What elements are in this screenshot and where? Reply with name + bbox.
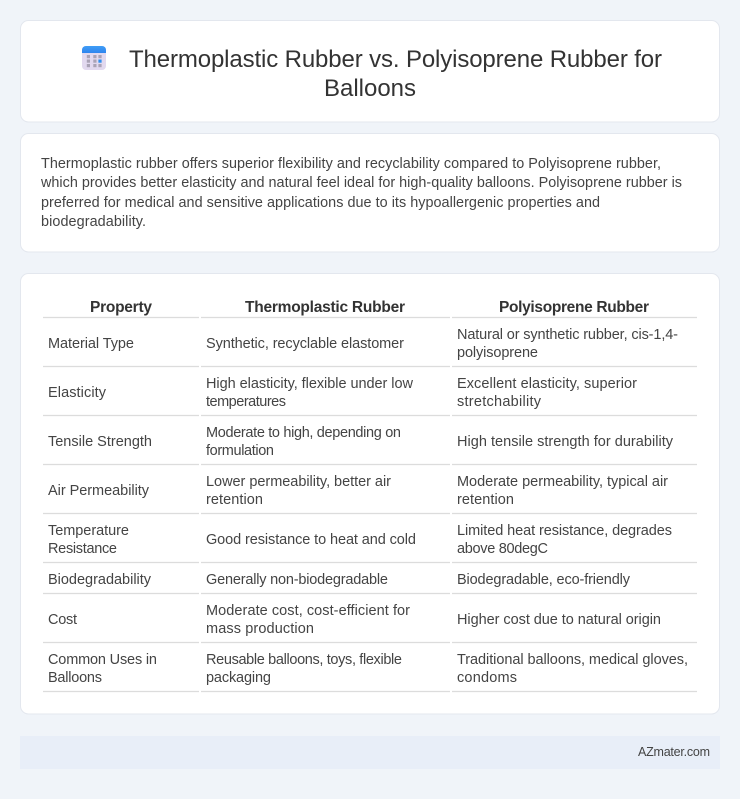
table header row: Polyisoprene Rubber [499,299,649,316]
title [129,46,662,102]
row: biodegradability: Biodegradable, eco-friendly [457,572,631,588]
row: biodegradability: Biodegradability [48,572,152,588]
row: biodegradability: Generally non-biodegradable [206,572,388,588]
row: tensile strength: Moderate to high, depending on [206,425,401,441]
row: elasticity: Excellent elasticity, superior [457,376,637,392]
row: material type: Synthetic, recyclable elastomer [206,336,404,352]
icon: calendar [82,46,106,70]
summary text: biodegradability. [41,214,146,230]
row: common uses: Reusable balloons, toys, flexible [206,652,402,668]
row: air permeability: Moderate permeability, typical air [457,474,668,490]
row: temperature resistance: Temperature [48,523,129,539]
row: common uses: packaging [206,670,271,686]
title: Balloons [324,75,416,102]
panel: comparison table [20,274,720,714]
row: tensile strength: formulation [206,443,274,459]
panel: title header [20,20,720,122]
row: air permeability: retention [457,492,514,508]
row: temperature resistance: Good resistance to heat and cold [206,532,416,548]
table header row: Property [90,299,152,316]
row: tensile strength: High tensile strength for durability [457,434,674,450]
panel: summary [20,134,720,252]
footer [20,736,720,769]
row: temperature resistance: above 80degC [457,541,548,557]
footer: AZmater.com [638,745,710,759]
row: common uses [48,652,688,686]
row: common uses: condoms [457,670,517,686]
row: elasticity: temperatures [206,394,286,410]
row: tensile strength [48,425,674,459]
table header row [90,299,649,316]
title: Thermoplastic Rubber vs. Polyisoprene Rubber for [129,46,662,73]
row: temperature resistance: Resistance [48,541,117,557]
row: biodegradability [48,572,631,588]
summary text: preferred for medical and sensitive applications due to its hypoallergenic properties and [41,195,600,211]
summary text [40,156,682,230]
row: temperature resistance: Limited heat resistance, degrades [457,523,672,539]
row: elasticity: High elasticity, flexible under low [206,376,414,392]
row: air permeability: retention [206,492,263,508]
row: material type [48,327,678,361]
row: cost: mass production [206,621,314,637]
row: common uses: Common Uses in [48,652,157,668]
row: elasticity: Elasticity [48,385,107,401]
row: tensile strength: Tensile Strength [48,434,152,450]
row: temperature resistance [48,523,672,557]
row: air permeability: Air Permeability [48,483,150,499]
row: material type: polyisoprene [457,345,538,361]
row: cost: Moderate cost, cost-efficient for [206,603,410,619]
row: material type: Material Type [48,336,134,352]
row: cost: Cost [48,612,77,628]
summary text: which provides better elasticity and natural feel ideal for high-quality balloons. Polyisoprene rubber is [40,175,682,191]
row: air permeability: Lower permeability, better air [206,474,391,490]
row: elasticity: stretchability [457,394,542,410]
row: cost: Higher cost due to natural origin [457,612,661,628]
summary text: Thermoplastic rubber offers superior flexibility and recyclability compared to Polyisoprene rubber, [41,156,661,172]
row: air permeability [48,474,668,508]
row: elasticity [48,376,637,410]
row: common uses: Balloons [48,670,102,686]
table header row: Thermoplastic Rubber [245,299,405,316]
row: cost [48,603,661,637]
row: common uses: Traditional balloons, medical gloves, [457,652,688,668]
row: material type: Natural or synthetic rubber, cis-1,4- [457,327,678,343]
